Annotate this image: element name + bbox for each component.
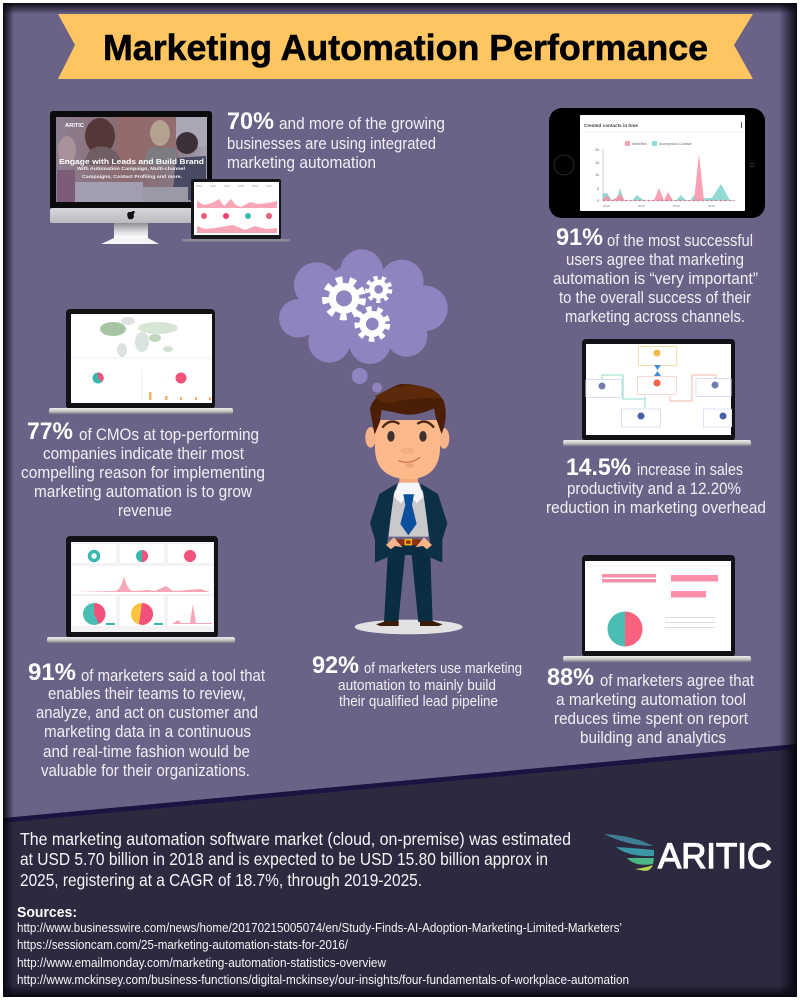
stat: 91% successful users	[553, 224, 758, 326]
icon: wing	[604, 834, 654, 871]
footer panel	[3, 744, 797, 997]
device: phone with contacts chart: Identified	[632, 142, 647, 146]
stat: 91% successful users: 91%	[556, 224, 603, 251]
stat: 91% marketers: analyze, and act on customer and	[36, 704, 258, 722]
stat: 14.5%: 14.5%	[566, 454, 631, 481]
stat: 92%: 92%	[312, 652, 359, 679]
stat: 91% marketers: 91%	[28, 659, 76, 686]
stat: 77%	[21, 418, 265, 520]
market summary text	[20, 829, 571, 890]
stat: 91% successful users: automation is “very important”	[553, 270, 758, 288]
device: phone with contacts chart: 5	[597, 187, 599, 191]
stat: 91% marketers: marketing data in a continuous	[44, 723, 251, 741]
sources: Sources:	[17, 904, 77, 921]
logo: Aritic: ARITIC	[658, 837, 772, 876]
stat: 70%	[227, 108, 445, 172]
sources	[17, 904, 629, 987]
device: laptop with report bars	[563, 555, 751, 662]
stat: 91% successful users: of the most successful	[607, 232, 753, 250]
title banner	[58, 14, 753, 79]
stat: 14.5%	[546, 454, 766, 517]
device: laptop with dashboard	[47, 536, 235, 643]
stat: 77%: marketing automation is to grow	[34, 483, 252, 501]
device: phone with contacts chart: 2019	[603, 204, 610, 208]
stat: 91% marketers	[28, 659, 265, 780]
stat: 91% successful users: to the overall success of their	[559, 289, 751, 307]
stat: 88%: a marketing automation tool	[556, 691, 746, 709]
device: desktop monitor with laptop: Campaigns, Contact Profiling and more.	[82, 174, 182, 179]
device: phone with contacts chart: 10	[595, 173, 599, 177]
stat: 88%: reduces time spent on report	[554, 710, 748, 728]
device: laptop with workflow	[563, 339, 751, 446]
thought cloud with gears	[279, 249, 448, 393]
device: phone with contacts chart: 0	[597, 199, 599, 203]
sources: http://www.mckinsey.com/business-functions/digital-mckinsey/our-insights/four-fundamentals-of-workplace-automation	[17, 973, 629, 987]
thought bubble large	[352, 368, 368, 384]
stat: 70%: 70%	[227, 108, 274, 135]
device: phone with contacts chart: 2019	[708, 204, 715, 208]
device: phone with contacts chart: 15	[595, 161, 599, 165]
device: phone with contacts chart: Anonymous Contact	[659, 142, 691, 146]
device: desktop monitor with laptop: Engage with Leads and Build Brand	[59, 159, 204, 166]
device: phone with contacts chart: Created contacts in time	[584, 123, 638, 129]
device: phone with contacts chart: 20	[595, 148, 599, 152]
stat: 91% marketers: valuable for their organizations.	[41, 762, 250, 780]
stat: 88%: of marketers agree that	[600, 672, 754, 690]
market summary text: 2025, registering at a CAGR of 18.7%, through 2019-2025.	[20, 870, 422, 890]
stat: 77%: of CMOs at top-performing	[79, 426, 259, 444]
stat: 88%	[547, 664, 754, 747]
device: phone with contacts chart: 2019	[673, 204, 680, 208]
market summary text: The marketing automation software market (cloud, on-premise) was estimated	[20, 829, 571, 849]
device: laptop with world map	[49, 309, 233, 414]
stat: 92%	[312, 652, 522, 710]
stat: 92%: automation to mainly build	[338, 678, 496, 694]
stat: 88%: 88%	[547, 664, 594, 691]
stat: 77%: revenue	[118, 502, 172, 520]
stat: 14.5%: increase in sales	[637, 461, 743, 479]
stat: 77%: companies indicate their most	[43, 445, 244, 463]
stat: 91% marketers: and real-time fashion would be	[43, 743, 250, 761]
stat: 92%: of marketers use marketing	[364, 661, 522, 677]
device: phone with contacts chart: 2019	[638, 204, 645, 208]
stat: 70%: businesses are using integrated	[227, 135, 436, 153]
device: desktop monitor with laptop: ARITIC	[65, 123, 84, 129]
sources: http://www.businesswire.com/news/home/20170215005074/en/Study-Finds-AI-Adoption-Marketing-Limited-Marketers’	[17, 921, 622, 935]
market summary text: at USD 5.70 billion in 2018 and is expected to be USD 15.80 billion approx in	[20, 849, 548, 869]
stat: 88%: building and analytics	[580, 729, 726, 747]
sources: http://www.emailmonday.com/marketing-automation-statistics-overview	[17, 956, 387, 970]
stat: 77%: 77%	[27, 418, 73, 445]
character: businessman	[355, 384, 463, 634]
stat: 14.5%: productivity and a 12.20%	[567, 480, 741, 498]
stat: 91% marketers: of marketers said a tool that	[81, 667, 265, 685]
title: Marketing Automation Performance	[103, 27, 708, 68]
icon: gears	[326, 278, 390, 339]
sources: https://sessioncam.com/25-marketing-automation-stats-for-2016/	[17, 938, 348, 952]
stat: 77%: compelling reason for implementing	[21, 464, 265, 482]
stat: 91% successful users: marketing across channels.	[565, 308, 745, 326]
stat: 91% marketers: enables their teams to review,	[48, 685, 246, 703]
thought bubble small	[372, 383, 382, 393]
device: desktop monitor with laptop: With Automation Campaign, Multi-channel	[77, 166, 185, 171]
logo: Aritic	[604, 834, 772, 876]
stat: 91% successful users: users agree that marketing	[566, 251, 744, 269]
stat: 92%: their qualified lead pipeline	[339, 694, 498, 710]
stat: 14.5%: reduction in marketing overhead	[546, 499, 766, 517]
device: desktop monitor with laptop	[50, 111, 290, 244]
stat: 70%: marketing automation	[227, 154, 376, 172]
device: phone with contacts chart	[549, 108, 765, 218]
stat: 70%: and more of the growing	[279, 115, 445, 133]
